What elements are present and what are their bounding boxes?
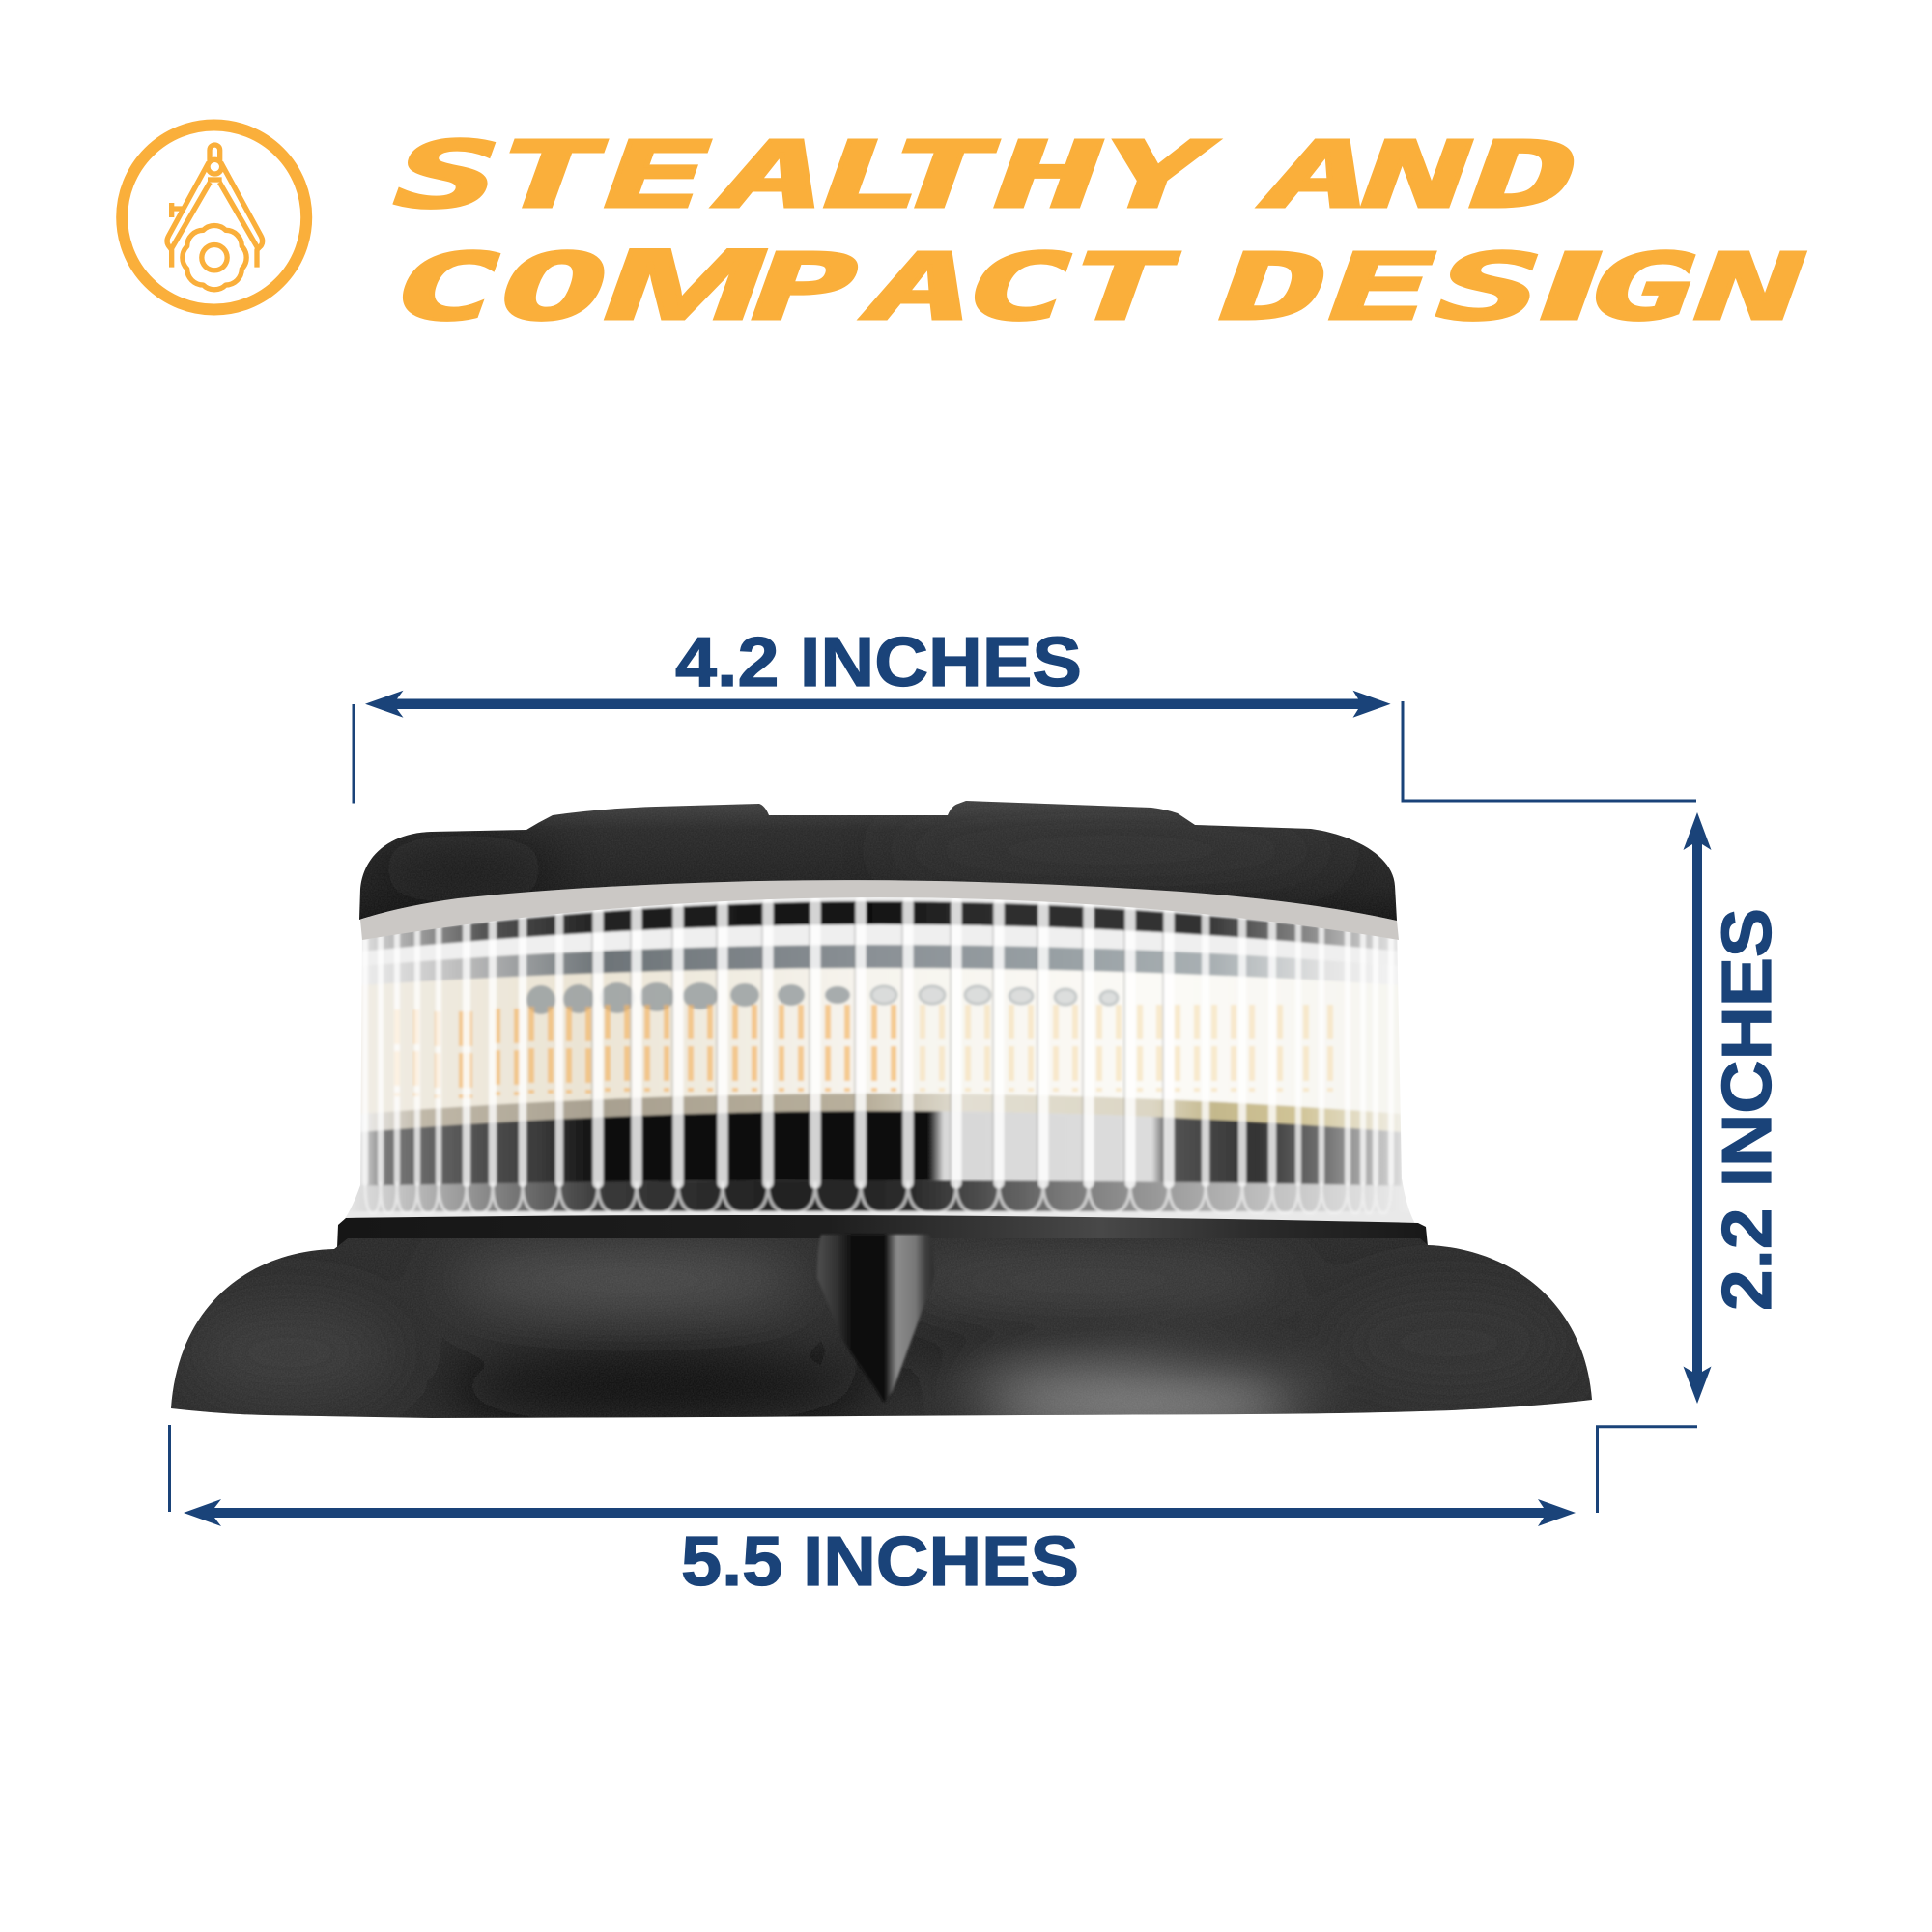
dimension: 2.2 inches bbox=[1598, 812, 1786, 1513]
dimension: 5.5 inches: 5.5 INCHES bbox=[681, 1523, 1079, 1601]
title line 1: STEALTHY AND bbox=[375, 123, 1595, 229]
clear ribbed lens bbox=[345, 897, 1414, 1223]
lens top rim bbox=[360, 880, 1399, 940]
title line 2: COMPACT DESIGN bbox=[375, 228, 1824, 341]
dimension: 4.2 inches bbox=[354, 624, 1696, 804]
icon: compass and gear in circle bbox=[122, 126, 306, 309]
dimension: 2.2 inches: 2.2 INCHES bbox=[1709, 908, 1786, 1311]
product: LED beacon light bbox=[164, 797, 1604, 1429]
lens rib highlights bbox=[365, 901, 1391, 1213]
dimension: 4.2 inches: 4.2 INCHES bbox=[675, 624, 1082, 701]
base housing bbox=[164, 1232, 1604, 1429]
collar ring bbox=[337, 1215, 1428, 1248]
dimension: 5.5 inches bbox=[170, 1425, 1576, 1601]
top cap bbox=[353, 797, 1406, 927]
alignment fin bbox=[817, 1235, 934, 1403]
title bbox=[375, 123, 1824, 341]
